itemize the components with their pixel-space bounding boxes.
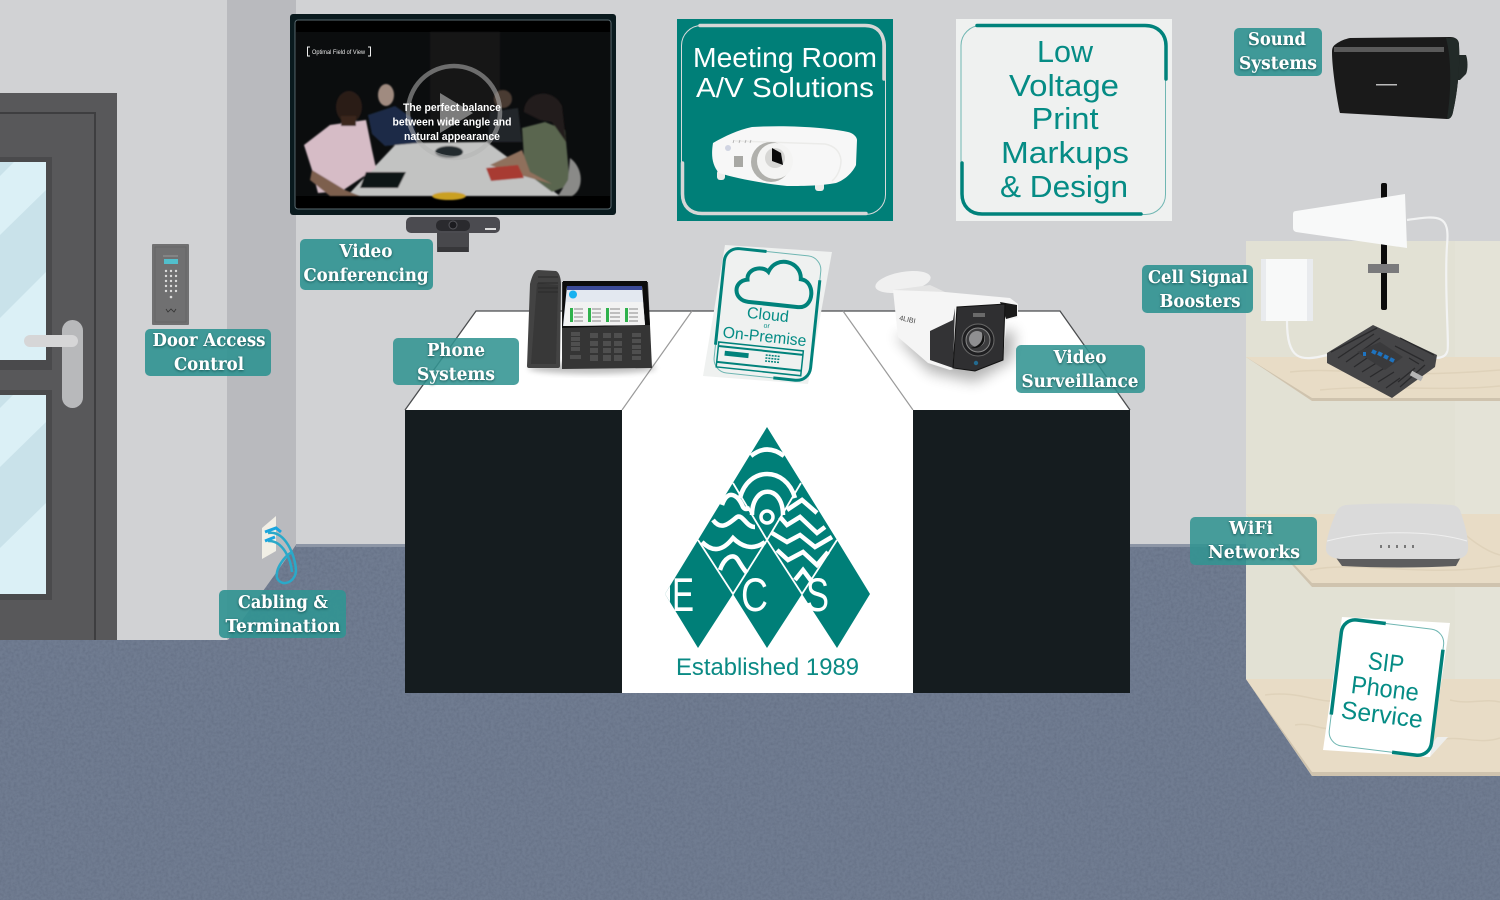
bracket [1368, 264, 1399, 273]
stand [1422, 737, 1448, 757]
sign title [1000, 34, 1129, 204]
camera front side [930, 308, 955, 368]
runner edges [622, 311, 913, 410]
label: sound systems: Systems [1239, 54, 1317, 74]
sign text [1340, 647, 1424, 734]
sign text: SIP [1366, 647, 1406, 679]
sign title: & Design [1000, 169, 1128, 204]
frame thick [962, 26, 1166, 214]
label: sound systems [1234, 28, 1322, 76]
lower window [0, 390, 52, 600]
sign title: A/V Solutions [696, 72, 874, 103]
video image [296, 32, 610, 200]
sound speaker [1332, 37, 1468, 119]
camera hood [1000, 302, 1017, 319]
sign title [693, 42, 877, 103]
floor [0, 545, 1500, 900]
video caption: natural appearance [404, 131, 500, 143]
sign text: Service [1340, 696, 1424, 734]
label: cabling and termination [219, 590, 346, 638]
desk phone [527, 270, 652, 369]
frame [713, 247, 822, 382]
label: wifi networks: WiFi [1228, 519, 1273, 539]
WiFi access point [1326, 504, 1468, 568]
label: cabling and termination: Termination [226, 617, 341, 637]
SIP phone service sign [1323, 617, 1450, 757]
label: phone systems: Phone [427, 341, 485, 361]
field of view label [308, 47, 370, 56]
lens [962, 324, 994, 356]
logo letters [672, 568, 829, 621]
door access panel [152, 244, 189, 325]
logo mark [665, 427, 870, 648]
frame thin [682, 26, 886, 214]
label: door access control: Control [174, 355, 244, 375]
label: cell signal boosters: Cell Signal [1148, 268, 1248, 288]
security camera [874, 267, 1018, 371]
phone base [562, 282, 652, 369]
sign title: Meeting Room [693, 42, 877, 73]
camera body [893, 290, 1018, 370]
field of view label: Optimal Field of View [312, 50, 366, 56]
wall jack and cables [262, 516, 296, 583]
frame [1328, 618, 1445, 757]
label: sound systems: Sound [1248, 30, 1306, 50]
alcove wall with shelves [1246, 241, 1500, 900]
sign text: Cloud [746, 305, 790, 326]
sign text [722, 303, 810, 350]
letter notch [665, 586, 670, 602]
icon: cloud [735, 257, 814, 308]
label: phone systems [393, 338, 519, 385]
frame thick [682, 26, 884, 214]
camera front [953, 304, 1005, 371]
photo scene [304, 32, 581, 200]
phone shadow [528, 362, 656, 374]
video caption [392, 102, 512, 143]
right zigzags [772, 500, 832, 582]
upper window [0, 157, 52, 370]
sheet [703, 245, 832, 384]
middle shelf [1246, 514, 1500, 587]
label: video conferencing: Conferencing [304, 266, 428, 286]
left waves [702, 495, 765, 573]
icon: projector [712, 126, 857, 191]
sign title: Markups [1001, 135, 1129, 170]
label: video surveillance: Video [1053, 348, 1106, 368]
label: video conferencing: Video [339, 242, 392, 262]
webcam [406, 217, 500, 252]
top shelf [1246, 357, 1500, 401]
table outline [405, 311, 1130, 410]
phone keypad [570, 332, 641, 361]
sign text: Phone [1350, 671, 1420, 707]
phone screen [562, 281, 650, 328]
established text: Established 1989 [676, 654, 859, 681]
arches [740, 450, 795, 515]
wall column shaded [227, 0, 296, 640]
cloud or on-premise sign [703, 245, 832, 384]
floor under shelves [1246, 679, 1500, 900]
label: door access control: Door Access [152, 331, 266, 351]
bottom shelf [1246, 679, 1500, 776]
diamond dividers [698, 483, 837, 594]
door [0, 93, 117, 640]
ECS logo [665, 427, 870, 681]
label: video surveillance: Surveillance [1022, 372, 1138, 392]
antenna pole [1381, 183, 1387, 310]
label: cell signal boosters: Boosters [1160, 292, 1241, 312]
indoor antenna [1261, 259, 1313, 321]
sign: low voltage print markups [956, 19, 1172, 221]
video caption: The perfect balance [403, 102, 501, 114]
phone handset [527, 270, 561, 368]
label: cell signal boosters [1142, 265, 1253, 313]
inner ring [761, 511, 773, 523]
mount [874, 267, 945, 300]
label: wifi networks [1190, 517, 1317, 565]
label: cabling and termination: Cabling & [238, 593, 328, 613]
sign sheet [1323, 617, 1450, 757]
cell signal booster [1261, 183, 1448, 398]
runner front [622, 410, 913, 693]
outdoor antenna [1293, 194, 1407, 248]
table front [405, 410, 1130, 693]
sign title: Print [1032, 101, 1099, 136]
table [405, 311, 1130, 693]
sign title: Low [1037, 34, 1094, 69]
door handle [24, 320, 83, 408]
security camera: 4LIBI [899, 315, 916, 325]
logo letters: E [672, 568, 694, 621]
table top [405, 311, 1130, 410]
sign: meeting room AV [677, 19, 893, 221]
label: video surveillance [1016, 345, 1145, 393]
label: video conferencing [300, 239, 433, 290]
cables [1287, 218, 1448, 358]
monitor [290, 14, 616, 215]
logo letters: C [741, 568, 768, 621]
label: phone systems: Systems [417, 365, 495, 385]
play button [408, 66, 500, 158]
sign text: On-Premise [722, 324, 807, 350]
label: wifi networks: Networks [1208, 543, 1300, 563]
video caption: between wide angle and [392, 116, 512, 128]
sign title: Voltage [1009, 68, 1119, 103]
frame thin [961, 26, 1166, 214]
label: door access control [145, 329, 271, 376]
icon: server [716, 342, 803, 376]
camera shadow [895, 330, 1015, 382]
baseboard [296, 544, 1296, 547]
logo letters: S [806, 568, 829, 621]
booster unit [1327, 325, 1437, 398]
sign text: or [763, 323, 771, 330]
